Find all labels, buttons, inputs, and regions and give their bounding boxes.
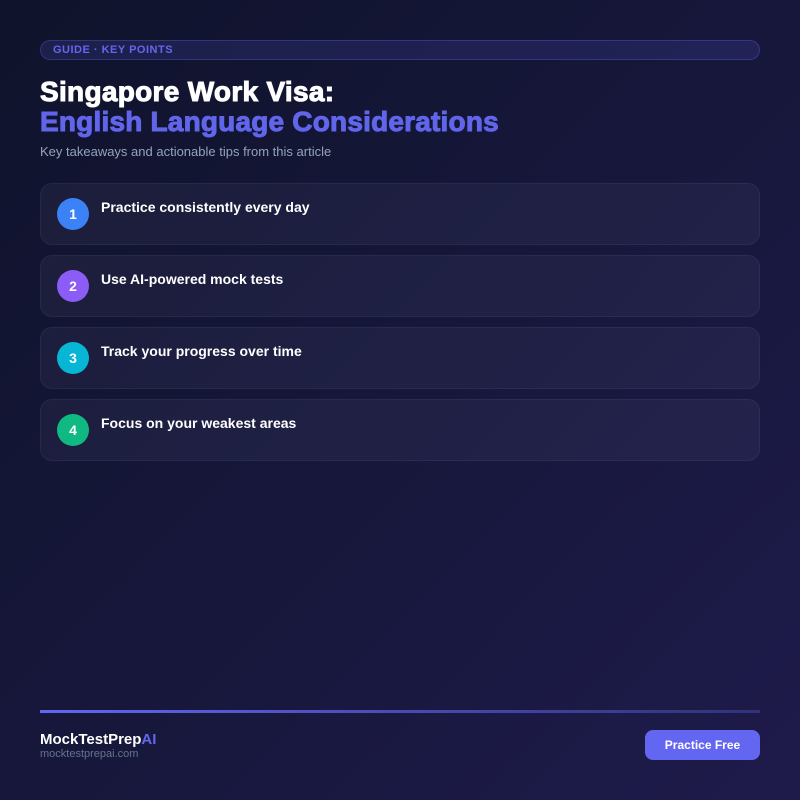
tip text 4: Focus on your weakest areas <box>101 415 296 431</box>
panel: tip 1 <box>40 183 760 245</box>
title <box>40 76 499 138</box>
panel: tip 4 <box>40 399 760 461</box>
subtitle: Key takeaways and actionable tips from this article <box>40 144 331 159</box>
badge: guide key points <box>40 40 760 60</box>
icon: number 2 <box>57 270 89 302</box>
icon: number 4 <box>57 414 89 446</box>
tip text 2: Use AI-powered mock tests <box>101 271 283 287</box>
title: English Language Considerations <box>40 106 499 137</box>
icon: number 4: 4 <box>69 422 77 438</box>
badge: guide key points: GUIDE · KEY POINTS <box>53 44 173 56</box>
button: practice free <box>645 730 760 760</box>
tip text 1: Practice consistently every day <box>101 199 310 215</box>
icon: number 3 <box>57 342 89 374</box>
panel: tip 3 <box>40 327 760 389</box>
title: Singapore Work Visa: <box>40 76 334 107</box>
footer divider bar <box>40 710 760 713</box>
brand url: mocktestprepai.com <box>40 748 138 760</box>
brand block <box>40 731 156 760</box>
icon: number 1 <box>57 198 89 230</box>
button: practice free: Practice Free <box>665 738 740 752</box>
icon: number 2: 2 <box>69 278 77 294</box>
tip text 3: Track your progress over time <box>101 343 302 359</box>
brand name: MockTestPrepAI <box>40 731 156 748</box>
icon: number 3: 3 <box>69 350 77 366</box>
icon: number 1: 1 <box>69 206 77 222</box>
panel: tip 2 <box>40 255 760 317</box>
